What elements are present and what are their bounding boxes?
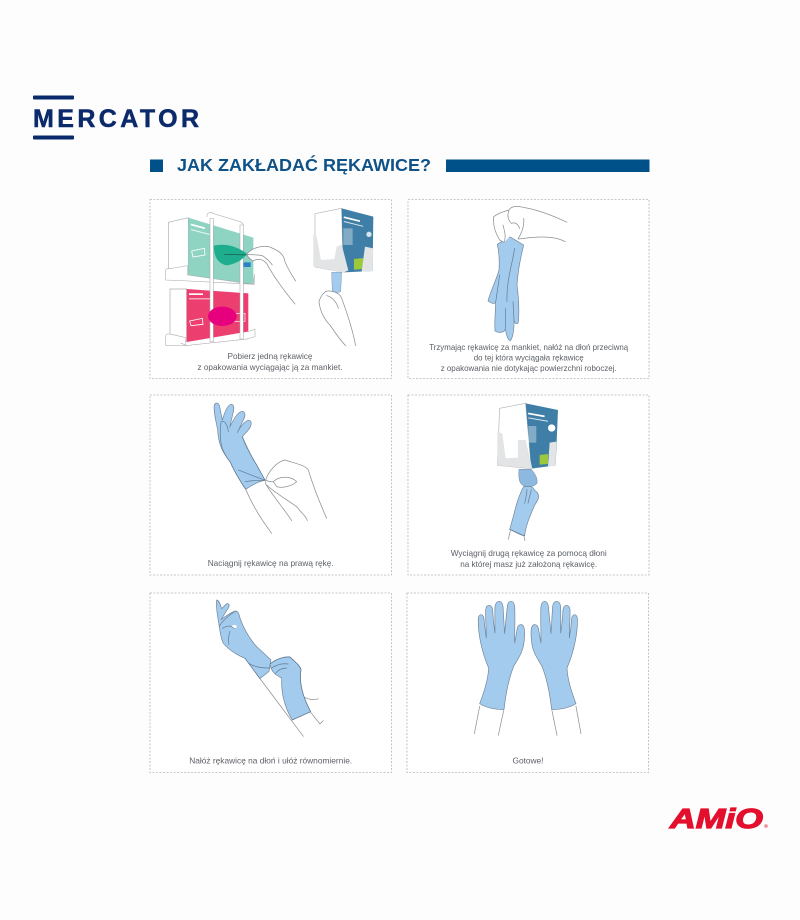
caption: Pobierz jedną rękawicę — [228, 351, 313, 361]
illustration: second glove from dispenser — [497, 403, 558, 541]
logo: AMiO: AMiO — [669, 803, 763, 834]
panel: step 2 hold the cuff — [408, 200, 649, 378]
left glove — [478, 601, 525, 710]
right glove — [531, 601, 577, 710]
panel: step 4 second glove — [408, 395, 649, 575]
caption: do tej która wyciągała rękawicę — [474, 352, 584, 362]
illustration: two gloved hands — [474, 601, 581, 735]
caption: Gotowe! — [512, 756, 544, 766]
glove cuff in dispenser — [332, 272, 342, 292]
caption: z opakowania wyciągając ją za mankiet. — [198, 362, 342, 372]
logo: Mercator — [33, 96, 199, 140]
caption: na której masz już założoną rękawicę. — [460, 559, 597, 569]
panel: step 3 pull the glove — [150, 395, 392, 575]
caption: Naciągnij rękawicę na prawą rękę. — [208, 558, 334, 568]
caption: Nałóż rękawicę na dłoń i ułóż równomiernie. — [189, 756, 352, 766]
heading — [150, 154, 650, 175]
caption: z opakowania nie dotykając powierzchni roboczej. — [441, 363, 617, 373]
caption: Trzymając rękawicę za mankiet, nałóż na dłoń przeciwną — [429, 342, 629, 352]
lower hand — [319, 291, 356, 346]
illustration: hand holding glove — [488, 206, 567, 341]
glove in teal box — [214, 245, 247, 265]
rack — [166, 213, 255, 346]
panel: step 5 adjust the glove — [150, 593, 392, 772]
hand taking a glove — [224, 246, 296, 304]
logo: Mercator: MERCATOR — [33, 105, 199, 133]
illustration: pulling glove on right hand — [214, 403, 327, 533]
dispenser box — [313, 208, 373, 273]
heading: JAK ZAKŁADAĆ RĘKAWICE? — [177, 154, 431, 175]
panel: step 6 ready — [407, 593, 648, 772]
caption: Wyciągnij drugą rękawicę za pomocą dłoni — [451, 548, 607, 558]
glove in pink box — [208, 307, 237, 326]
illustration: dispensers and hands — [166, 208, 373, 346]
illustration: adjusting gloves — [216, 600, 323, 736]
panel: step 1 take a glove — [150, 200, 392, 378]
